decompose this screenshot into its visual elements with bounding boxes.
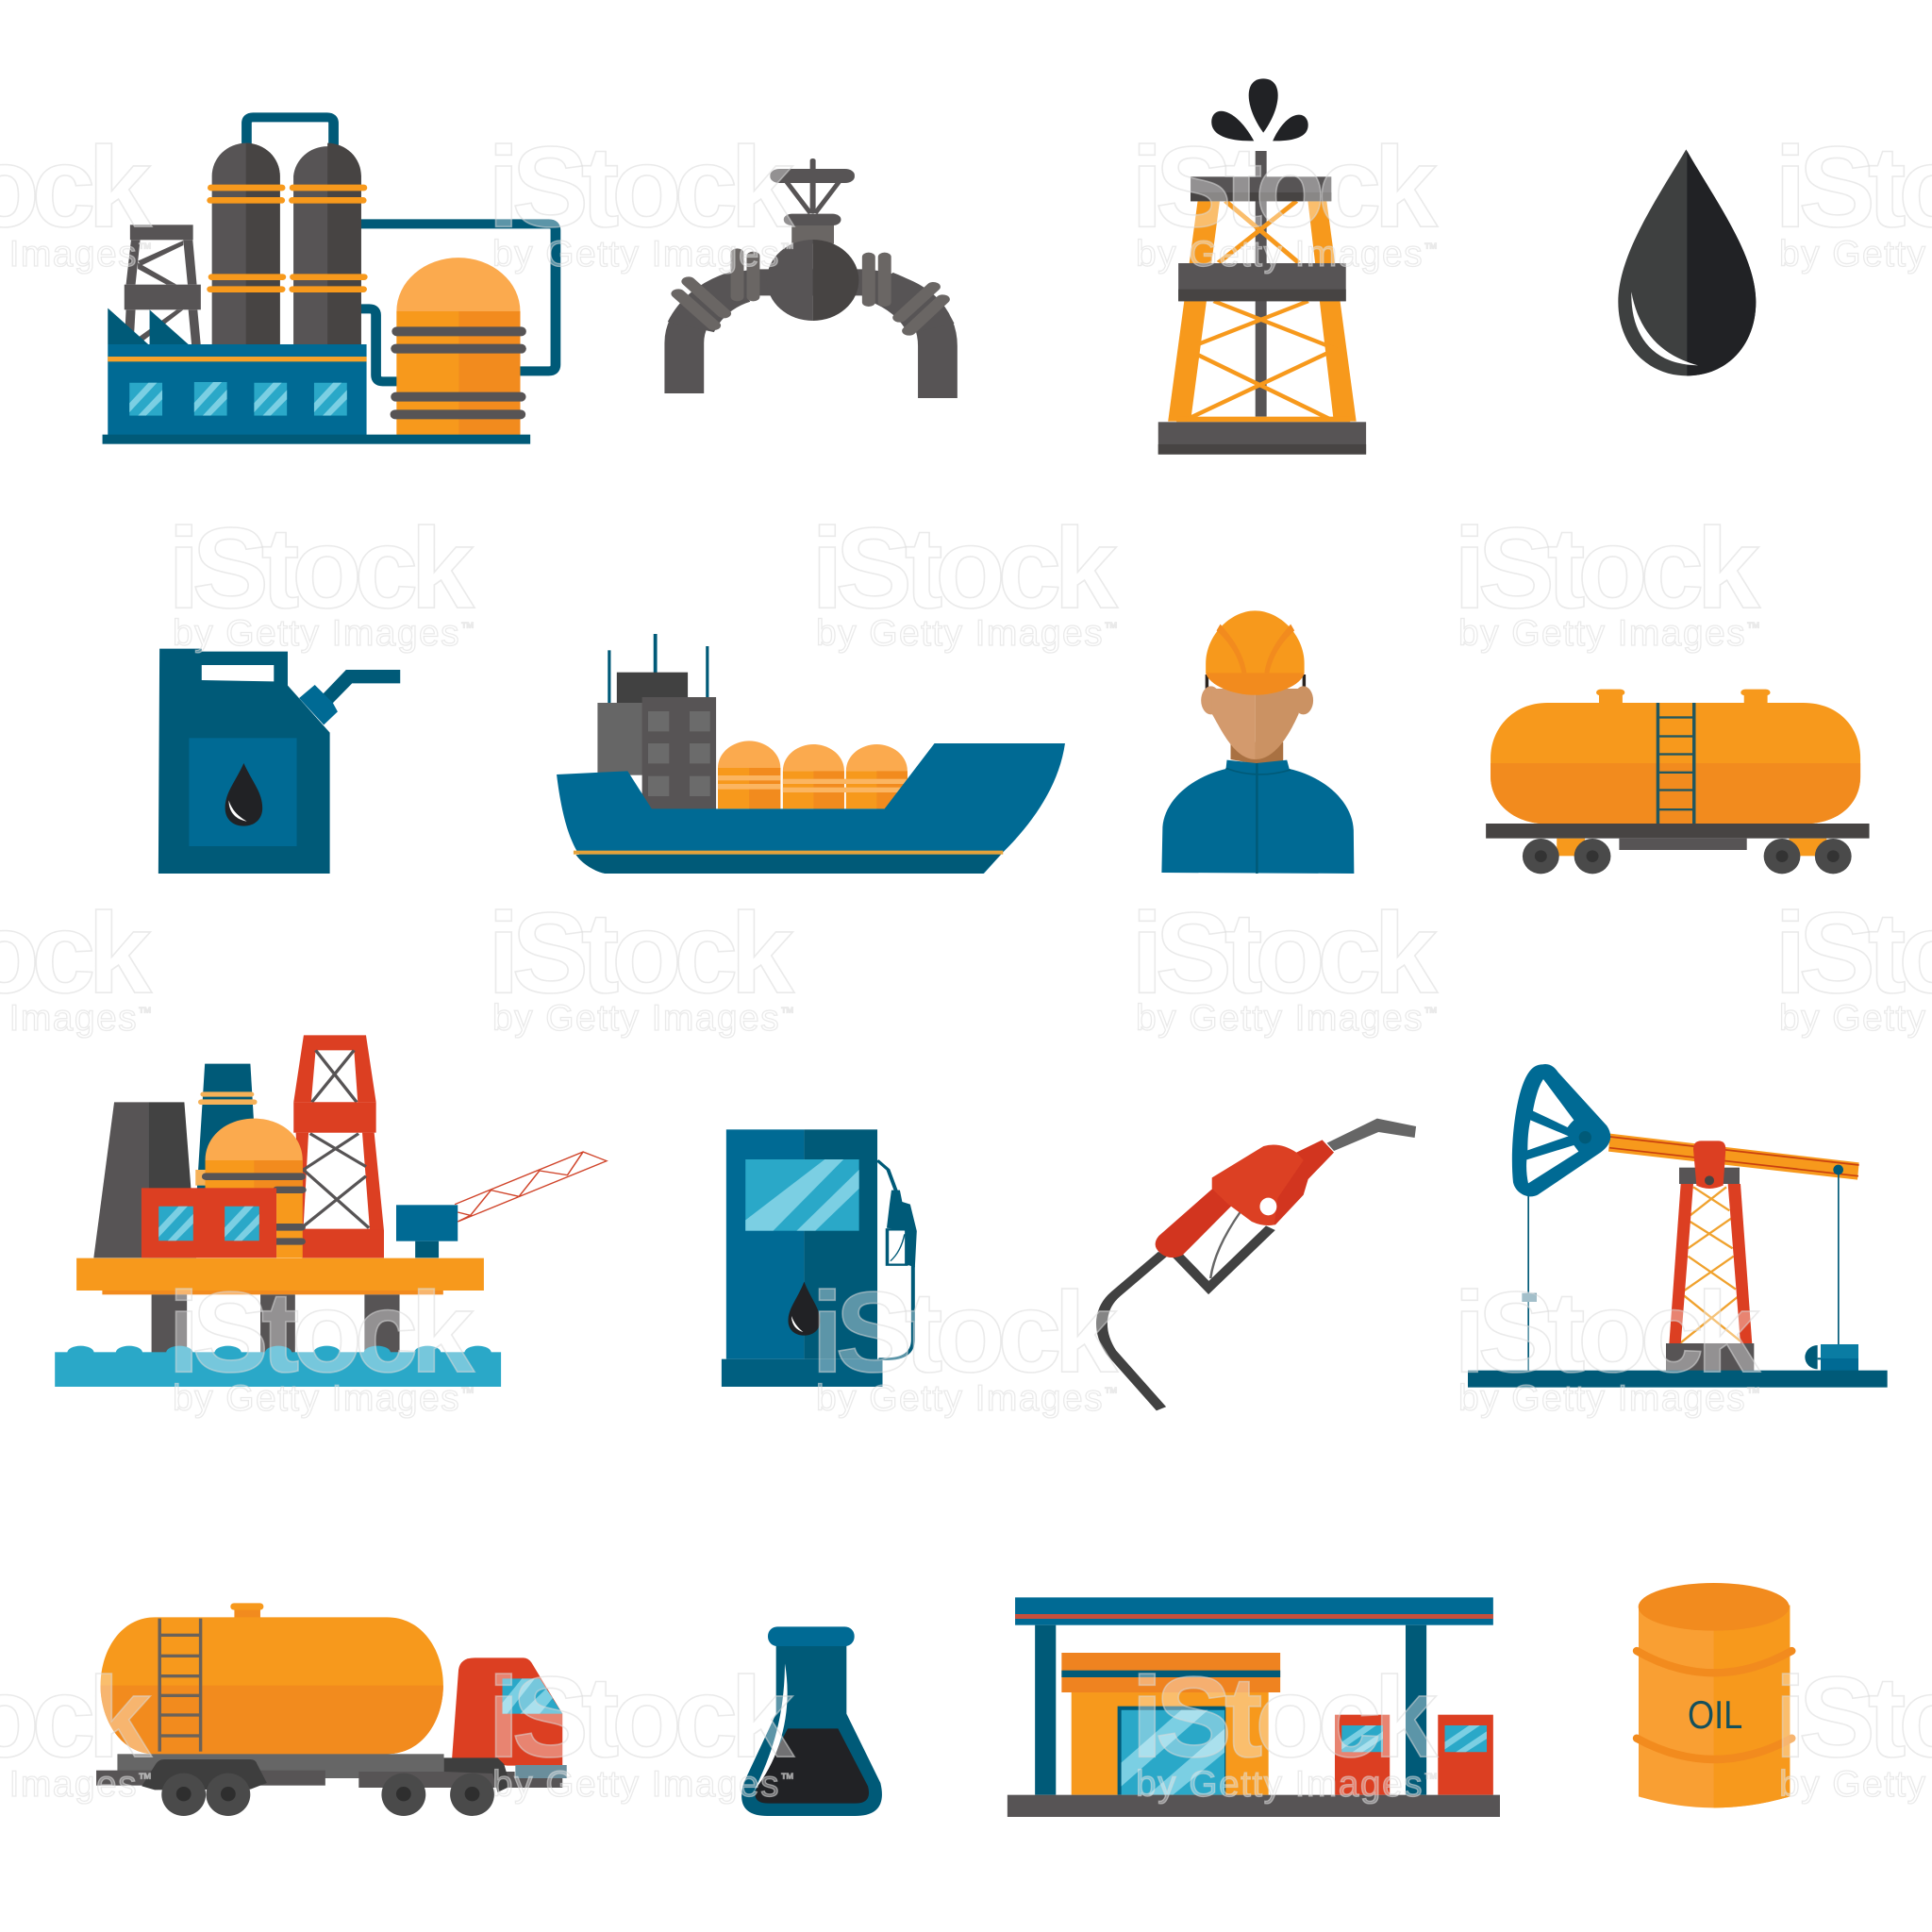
- platform legs: [152, 1294, 400, 1353]
- walking beam: [1608, 1134, 1859, 1180]
- watermarks: ™: [1746, 1385, 1760, 1401]
- icon: pumpjack: [1468, 1064, 1888, 1388]
- ground: [1468, 1371, 1888, 1388]
- icon: fuel pump: [722, 1129, 917, 1387]
- watermarks: ™: [138, 241, 152, 257]
- watermarks: iStock: [1131, 1653, 1438, 1781]
- tank: [1491, 703, 1860, 824]
- icon: oil worker: [1161, 610, 1354, 874]
- deck: [76, 1258, 484, 1294]
- watermarks: by Getty Images: [1458, 613, 1745, 654]
- antennas: [608, 634, 708, 704]
- watermarks: ™: [780, 1005, 794, 1021]
- wheels: [1523, 839, 1852, 874]
- watermarks: ™: [1424, 241, 1438, 257]
- building: [108, 308, 367, 436]
- watermarks: iStock: [488, 123, 794, 251]
- watermarks: ™: [460, 620, 475, 636]
- centre pole: [1256, 151, 1267, 417]
- vessel bands: [207, 185, 368, 292]
- spout: [299, 670, 400, 724]
- watermarks: by Getty Images: [492, 234, 779, 275]
- watermarks: iStock: [488, 889, 794, 1017]
- oil spray drops: [1211, 78, 1308, 141]
- watermarks: ™: [460, 1385, 475, 1401]
- left fuel dispenser: [1335, 1715, 1390, 1795]
- watermarks: ™: [780, 241, 794, 257]
- watermarks: by Getty Images: [173, 613, 459, 654]
- watermarks: iStock: [1131, 889, 1438, 1017]
- chimney: [93, 1102, 196, 1257]
- icon: tanker ship: [557, 634, 1065, 874]
- trigger guard: [1176, 1212, 1271, 1288]
- bearing: [1679, 1141, 1740, 1189]
- icon: tanker truck: [96, 1603, 567, 1816]
- derrick legs: [1168, 201, 1357, 422]
- platforms: [1158, 176, 1366, 455]
- right column vessel: [293, 143, 361, 346]
- watermarks: by Getty Images: [1458, 1378, 1745, 1419]
- hard hat: [1206, 610, 1305, 695]
- handle: [1156, 1140, 1334, 1257]
- watermarks: by Getty Images: [816, 613, 1103, 654]
- watermarks: ™: [1424, 1005, 1438, 1021]
- watermarks: iStock: [811, 1268, 1118, 1396]
- barrel ribs: [1637, 1651, 1791, 1759]
- cab: [452, 1657, 567, 1788]
- watermarks: by Getty Images: [173, 1378, 459, 1419]
- can drop: [225, 763, 262, 826]
- watermarks: ™: [138, 1005, 152, 1021]
- icon: oil barrel: [1637, 1583, 1791, 1807]
- angled flanges: [678, 281, 942, 331]
- jacket: [1161, 760, 1354, 874]
- refinery pipes: [246, 117, 556, 381]
- polished rod lines: [1527, 1165, 1843, 1371]
- watermarks: iStock: [1454, 504, 1760, 632]
- bogies: [1557, 839, 1826, 856]
- tower legs: [1669, 1184, 1752, 1344]
- flanges: [731, 248, 891, 307]
- hose and nozzle: [877, 1160, 917, 1359]
- pump drop: [789, 1282, 820, 1336]
- blue stack: [197, 1064, 258, 1189]
- hose: [1102, 1254, 1162, 1408]
- superstructure: [597, 673, 716, 809]
- motor: [1805, 1344, 1858, 1371]
- derrick: [293, 1035, 384, 1257]
- barrel body: [1639, 1606, 1790, 1807]
- icon: refinery: [103, 117, 556, 444]
- watermarks: ™: [1104, 620, 1118, 636]
- watermarks: iStock: [1131, 123, 1438, 251]
- right fuel dispenser: [1438, 1715, 1493, 1795]
- watermarks: iStock: [168, 504, 475, 632]
- flask highlight: [754, 1663, 788, 1790]
- crane: [396, 1152, 607, 1257]
- tower base: [1666, 1343, 1754, 1371]
- icon: oil derrick: [1158, 78, 1366, 455]
- truck wheels: [161, 1774, 494, 1816]
- red module: [142, 1188, 276, 1257]
- left column vessel: [212, 143, 280, 346]
- pump body: [722, 1129, 882, 1387]
- pipes: [684, 282, 938, 398]
- icon: fuel nozzle: [1102, 1119, 1416, 1408]
- icon: jerry can: [158, 649, 400, 874]
- can label: [189, 738, 297, 846]
- watermarks: ™: [138, 1771, 152, 1787]
- icon: oil drop: [1618, 149, 1756, 375]
- dome tank: [195, 1119, 307, 1257]
- oil in flask: [756, 1728, 869, 1804]
- canopy: [1015, 1597, 1493, 1795]
- ladder: [1657, 703, 1695, 824]
- barrel top: [1639, 1583, 1790, 1631]
- valve body: [767, 240, 858, 321]
- watermarks: by Getty Images: [492, 998, 779, 1039]
- chassis: [96, 1754, 515, 1788]
- icon: rail tank car: [1486, 690, 1870, 874]
- icon: flask: [741, 1626, 882, 1816]
- neck: [1231, 742, 1283, 764]
- valve stem and wheel: [770, 158, 855, 243]
- icon: pipeline valve: [678, 158, 942, 398]
- fenders: [142, 1757, 510, 1792]
- watermarks: iStock: [488, 1653, 794, 1781]
- icon: offshore platform: [55, 1035, 607, 1387]
- watermarks: ™: [780, 1771, 794, 1787]
- cross braces: [1186, 201, 1336, 420]
- watermarks: by Getty Images: [816, 1378, 1103, 1419]
- watermarks: iStock: [811, 504, 1118, 632]
- pump screen: [745, 1159, 859, 1231]
- caps: [1596, 690, 1771, 704]
- cargo domes: [718, 741, 908, 808]
- truck ladder: [158, 1619, 202, 1752]
- hull: [557, 743, 1065, 874]
- face: [1212, 689, 1299, 759]
- platform: [1486, 824, 1870, 850]
- watermarks: by Getty Images: [1136, 998, 1423, 1039]
- refinery base: [103, 435, 530, 444]
- icon: gas station: [1008, 1597, 1500, 1817]
- tower lattice: [1681, 1187, 1740, 1342]
- horse head: [1512, 1064, 1610, 1196]
- watermarks: iStock: [168, 1268, 475, 1396]
- shop: [1061, 1653, 1280, 1795]
- storage tank: [391, 258, 526, 436]
- watermarks: iStock: [1454, 1268, 1760, 1396]
- watermarks: ™: [1746, 620, 1760, 636]
- truck tank: [101, 1603, 443, 1754]
- ears and hair: [1201, 675, 1313, 714]
- watermarks: ™: [1424, 1771, 1438, 1787]
- watermarks: ™: [1104, 1385, 1118, 1401]
- small derrick: [125, 225, 201, 346]
- watermarks: by Getty Images: [1136, 1764, 1423, 1805]
- can body: [158, 649, 330, 874]
- watermarks: by Getty Images: [1136, 234, 1423, 275]
- rod clamp: [1522, 1293, 1537, 1302]
- barrel label: OIL: [1688, 1693, 1742, 1737]
- forecourt: [1008, 1795, 1500, 1817]
- watermarks: by Getty Images: [492, 1764, 779, 1805]
- spout: [1327, 1119, 1416, 1151]
- sea: [55, 1346, 501, 1387]
- flask lip: [768, 1626, 855, 1646]
